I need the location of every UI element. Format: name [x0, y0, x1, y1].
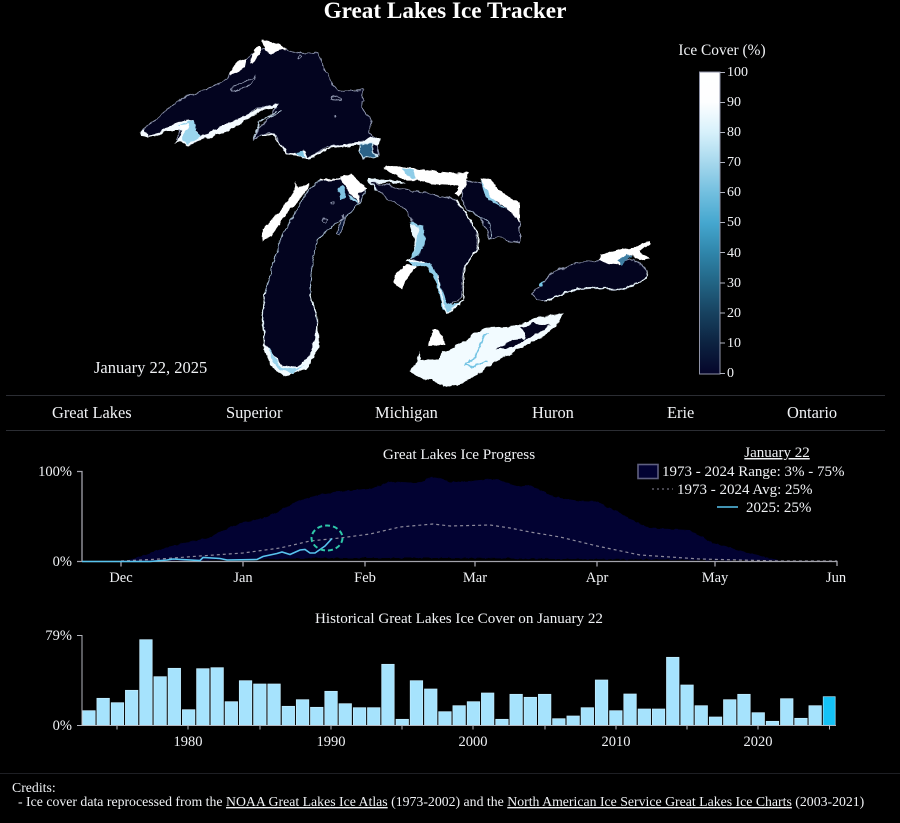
chart legend: 1973 - 2024 Range: 3% - 75% [662, 464, 844, 480]
colorbar legend [678, 42, 766, 381]
average line [121, 524, 837, 561]
colorbar ticks: 50 [727, 215, 741, 230]
navigation row: Michigan [375, 403, 438, 422]
chart legend [638, 445, 844, 516]
colorbar ticks: 70 [727, 155, 741, 170]
colorbar ticks: 90 [727, 95, 741, 110]
chart title: Great Lakes Ice Progress [383, 446, 535, 463]
credits: Credits: [12, 780, 56, 795]
axis labels: 2020 [744, 734, 772, 750]
axis labels: 79% [45, 628, 72, 644]
colorbar ramp [700, 72, 720, 374]
chart legend: January 22 [744, 445, 810, 461]
historical range band [121, 477, 783, 561]
axes [77, 472, 837, 566]
colorbar ticks: 100 [727, 65, 748, 80]
colorbar ticks: 0 [727, 366, 734, 381]
colorbar ticks: 20 [727, 306, 741, 321]
axis labels: Mar [463, 570, 487, 586]
navigation row: Huron [532, 403, 574, 422]
chart legend: 2025: 25% [746, 500, 811, 516]
credits: - Ice cover data reprocessed from the NOAA Great Lakes Ice Atlas (1973-2002) and the North American Ice Service Great Lakes Ice Charts (2003-2021) [18, 794, 864, 810]
navigation row [6, 396, 885, 430]
navigation row: Ontario [787, 403, 837, 422]
lake: Erie and Ontario [410, 240, 650, 387]
map: Great Lakes ice cover [139, 40, 650, 387]
colorbar ticks: 80 [727, 125, 741, 140]
axes [77, 636, 836, 730]
axis labels: 0% [53, 554, 72, 570]
axis labels [45, 628, 772, 750]
chart: Great Lakes ice progress [38, 445, 847, 586]
colorbar ticks: 60 [727, 185, 741, 200]
colorbar ticks: 10 [727, 336, 741, 351]
axis labels [38, 464, 847, 586]
bars [83, 640, 835, 725]
colorbar ticks: 40 [727, 246, 741, 261]
navigation row: Great Lakes [52, 403, 132, 422]
2025 line [82, 538, 332, 562]
colorbar ticks: 30 [727, 276, 741, 291]
lake: Superior [139, 40, 379, 158]
axis labels: Dec [109, 570, 133, 586]
current date marker [312, 526, 342, 550]
axis labels: Jun [826, 570, 847, 586]
chart: historical ice cover on January 22 [45, 611, 836, 750]
navigation row: Erie [667, 403, 694, 422]
axis labels: Apr [586, 570, 608, 586]
credits [0, 774, 900, 810]
lake: Michigan and Huron [262, 165, 520, 376]
axis labels: 2000 [458, 734, 488, 750]
date label: January 22, 2025 [94, 358, 207, 377]
axis labels: 1980 [174, 734, 202, 750]
chart legend: 1973 - 2024 Avg: 25% [677, 482, 813, 498]
axis labels: May [702, 570, 729, 586]
chart title: Historical Great Lakes Ice Cover on January 22 [315, 611, 603, 627]
axis labels: Feb [354, 570, 376, 586]
axis labels: Jan [233, 570, 253, 586]
axis labels: 1990 [316, 734, 346, 750]
colorbar ticks [720, 65, 748, 381]
colorbar title: Ice Cover (%) [678, 42, 766, 59]
axis labels: 100% [38, 464, 72, 480]
navigation row: Superior [226, 403, 283, 422]
axis labels: 0% [53, 718, 72, 734]
axis labels: 2010 [602, 734, 630, 750]
